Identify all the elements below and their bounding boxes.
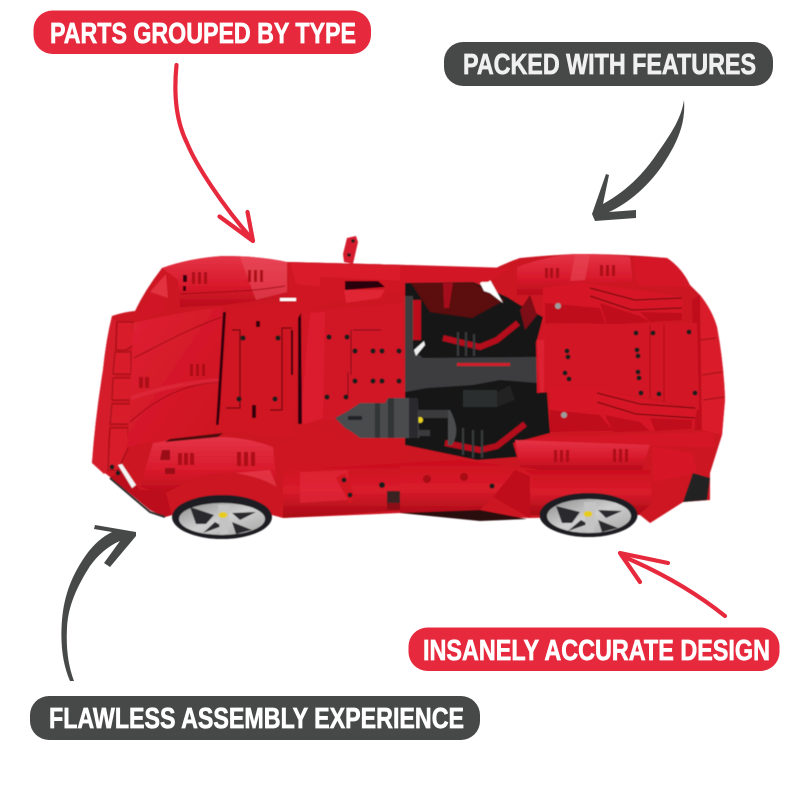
car body silhouette	[92, 254, 725, 523]
hood panel	[127, 307, 223, 447]
bottom front fender	[140, 433, 277, 494]
arrow: insanely accurate design	[620, 553, 725, 616]
callout: packed with features	[444, 42, 773, 86]
front deck panel	[218, 302, 300, 437]
front grille louvres	[108, 322, 134, 470]
upper rear louvre detail	[543, 283, 683, 325]
rear strut tower	[411, 283, 505, 318]
upper rear fender	[517, 254, 690, 295]
centre deck panel	[298, 303, 405, 424]
upper door strip	[280, 262, 407, 313]
car model	[92, 236, 725, 539]
callout: parts grouped by type: PARTS GROUPED BY TYPE	[50, 18, 356, 50]
centre lower deck	[275, 426, 407, 470]
rear deck panel	[536, 323, 699, 410]
lower rear fender	[515, 440, 697, 482]
red hoses	[443, 323, 525, 450]
callout: flawless assembly experience: FLAWLESS ASSEMBLY EXPERIENCE	[49, 703, 464, 735]
tail piece	[650, 477, 693, 523]
rear strip behind cockpit	[400, 265, 510, 283]
front nose strip	[92, 316, 116, 474]
grey frame	[405, 296, 538, 392]
grey engine block	[335, 398, 419, 438]
lower rear louvre detail	[550, 390, 697, 432]
callout: insanely accurate design	[408, 628, 780, 671]
black rear bumper	[683, 473, 710, 502]
nose corner and headlight	[110, 464, 172, 517]
hood rear gap	[216, 312, 226, 425]
front top fender	[136, 256, 287, 320]
arrow: parts grouped by type	[175, 65, 253, 241]
rear spoiler strip	[692, 295, 725, 435]
mirror	[343, 236, 358, 264]
front door lower	[283, 463, 407, 518]
arrow: packed with features	[592, 100, 684, 221]
rear wheel	[540, 493, 638, 537]
callout: flawless assembly experience	[30, 696, 480, 740]
front wheel	[172, 495, 272, 539]
callout: parts grouped by type	[34, 10, 371, 54]
rear door lower	[400, 460, 532, 521]
engine bay	[405, 278, 550, 460]
rear arch body	[523, 470, 653, 515]
arrow: flawless assembly experience	[61, 525, 136, 681]
rear lower band	[515, 432, 715, 447]
engine details	[463, 390, 497, 407]
